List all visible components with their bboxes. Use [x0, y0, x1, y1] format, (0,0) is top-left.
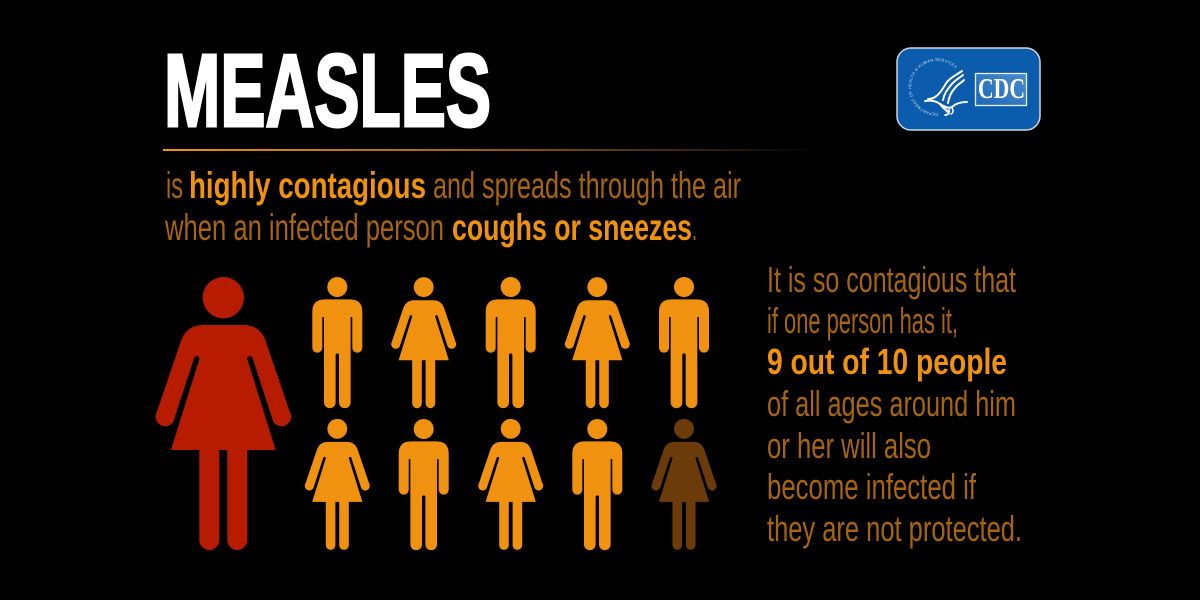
intro text: and spreads through the air	[433, 165, 741, 206]
CDC wordmark: CDC	[978, 73, 1025, 105]
icon: large red infected woman	[156, 277, 291, 550]
icon: woman row 1 col 4	[565, 277, 630, 408]
title: MEASLES	[164, 33, 491, 148]
side text: contagiousness: they are not protected.	[767, 508, 1022, 549]
intro text: is	[166, 165, 183, 206]
icon: eagle	[925, 71, 967, 115]
icon: woman row 2 col 3	[478, 419, 543, 550]
icon: dark woman, not infected	[651, 419, 717, 550]
divider rule	[163, 149, 820, 151]
intro text: highly contagious	[189, 165, 426, 206]
side text: contagiousness: It is so contagious that	[767, 259, 1016, 300]
intro text: .	[692, 207, 697, 248]
side text: contagiousness: of all ages around him	[767, 383, 1016, 424]
icon: man row 2 col 4	[572, 419, 622, 550]
side text: contagiousness: become infected if	[767, 466, 977, 507]
icon: man row 2 col 2	[399, 419, 449, 550]
intro text	[164, 165, 741, 248]
side text: contagiousness: or her will also	[767, 425, 931, 466]
CDC logo	[896, 47, 1041, 131]
intro text: when an infected person	[164, 207, 444, 248]
icon: woman row 2 col 1	[305, 419, 370, 550]
logo badge	[897, 48, 1040, 130]
icon: woman row 1 col 2	[391, 277, 456, 408]
side text: contagiousness: 9 out of 10 people	[767, 341, 1007, 382]
intro text: coughs or sneezes	[452, 207, 692, 248]
side text: contagiousness	[767, 259, 1022, 549]
icon: man row 1 col 3	[486, 277, 536, 408]
side text: contagiousness: if one person has it,	[767, 300, 958, 341]
icon: man row 1 col 5	[659, 277, 709, 408]
CDC box	[976, 74, 1026, 106]
icon: man row 1 col 1	[312, 277, 362, 408]
people grid: ten small figures	[305, 277, 717, 550]
